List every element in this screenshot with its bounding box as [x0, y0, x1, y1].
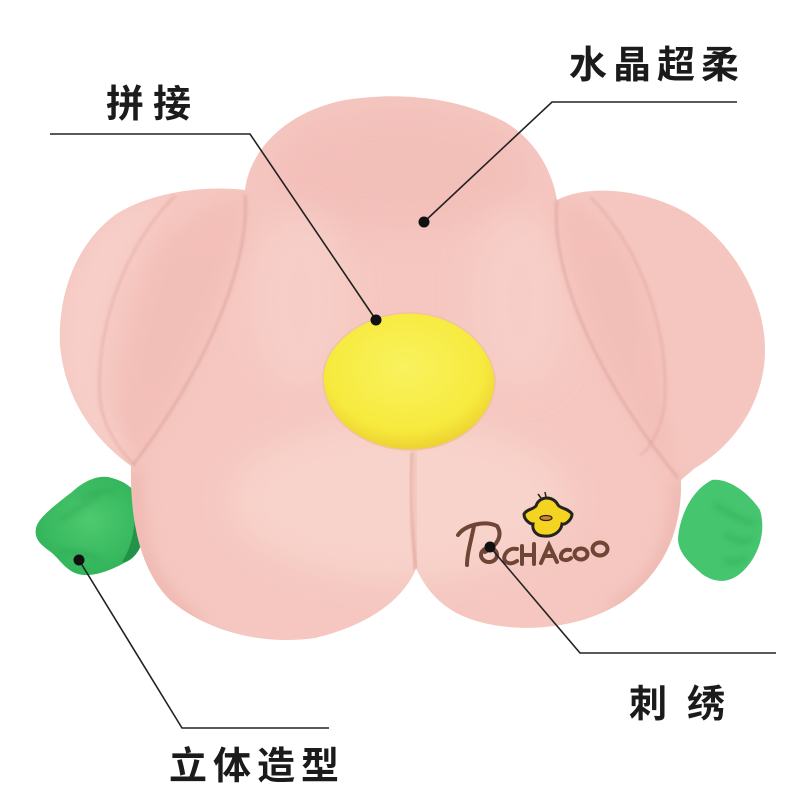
petal shading [305, 139, 495, 201]
label: 拼接: 拼接 [106, 84, 200, 126]
callout line: 刺绣 [484, 542, 776, 653]
embroidery: duck [524, 492, 572, 536]
label: 立体造型: 立体造型 [169, 746, 345, 788]
embroidery: POCHACOO logo [458, 523, 608, 565]
callout line: 拼接 [50, 134, 382, 326]
callout line: 立体造型 [74, 554, 329, 728]
icon: left green leaf [36, 477, 145, 575]
seams [133, 195, 246, 465]
yellow centre [323, 313, 495, 450]
icon: right green leaf [678, 480, 762, 581]
label: 刺绣: 刺绣 [629, 684, 745, 726]
callout line: 水晶超柔 [418, 102, 737, 228]
plush flower body [60, 96, 765, 640]
label: 水晶超柔: 水晶超柔 [569, 45, 745, 87]
